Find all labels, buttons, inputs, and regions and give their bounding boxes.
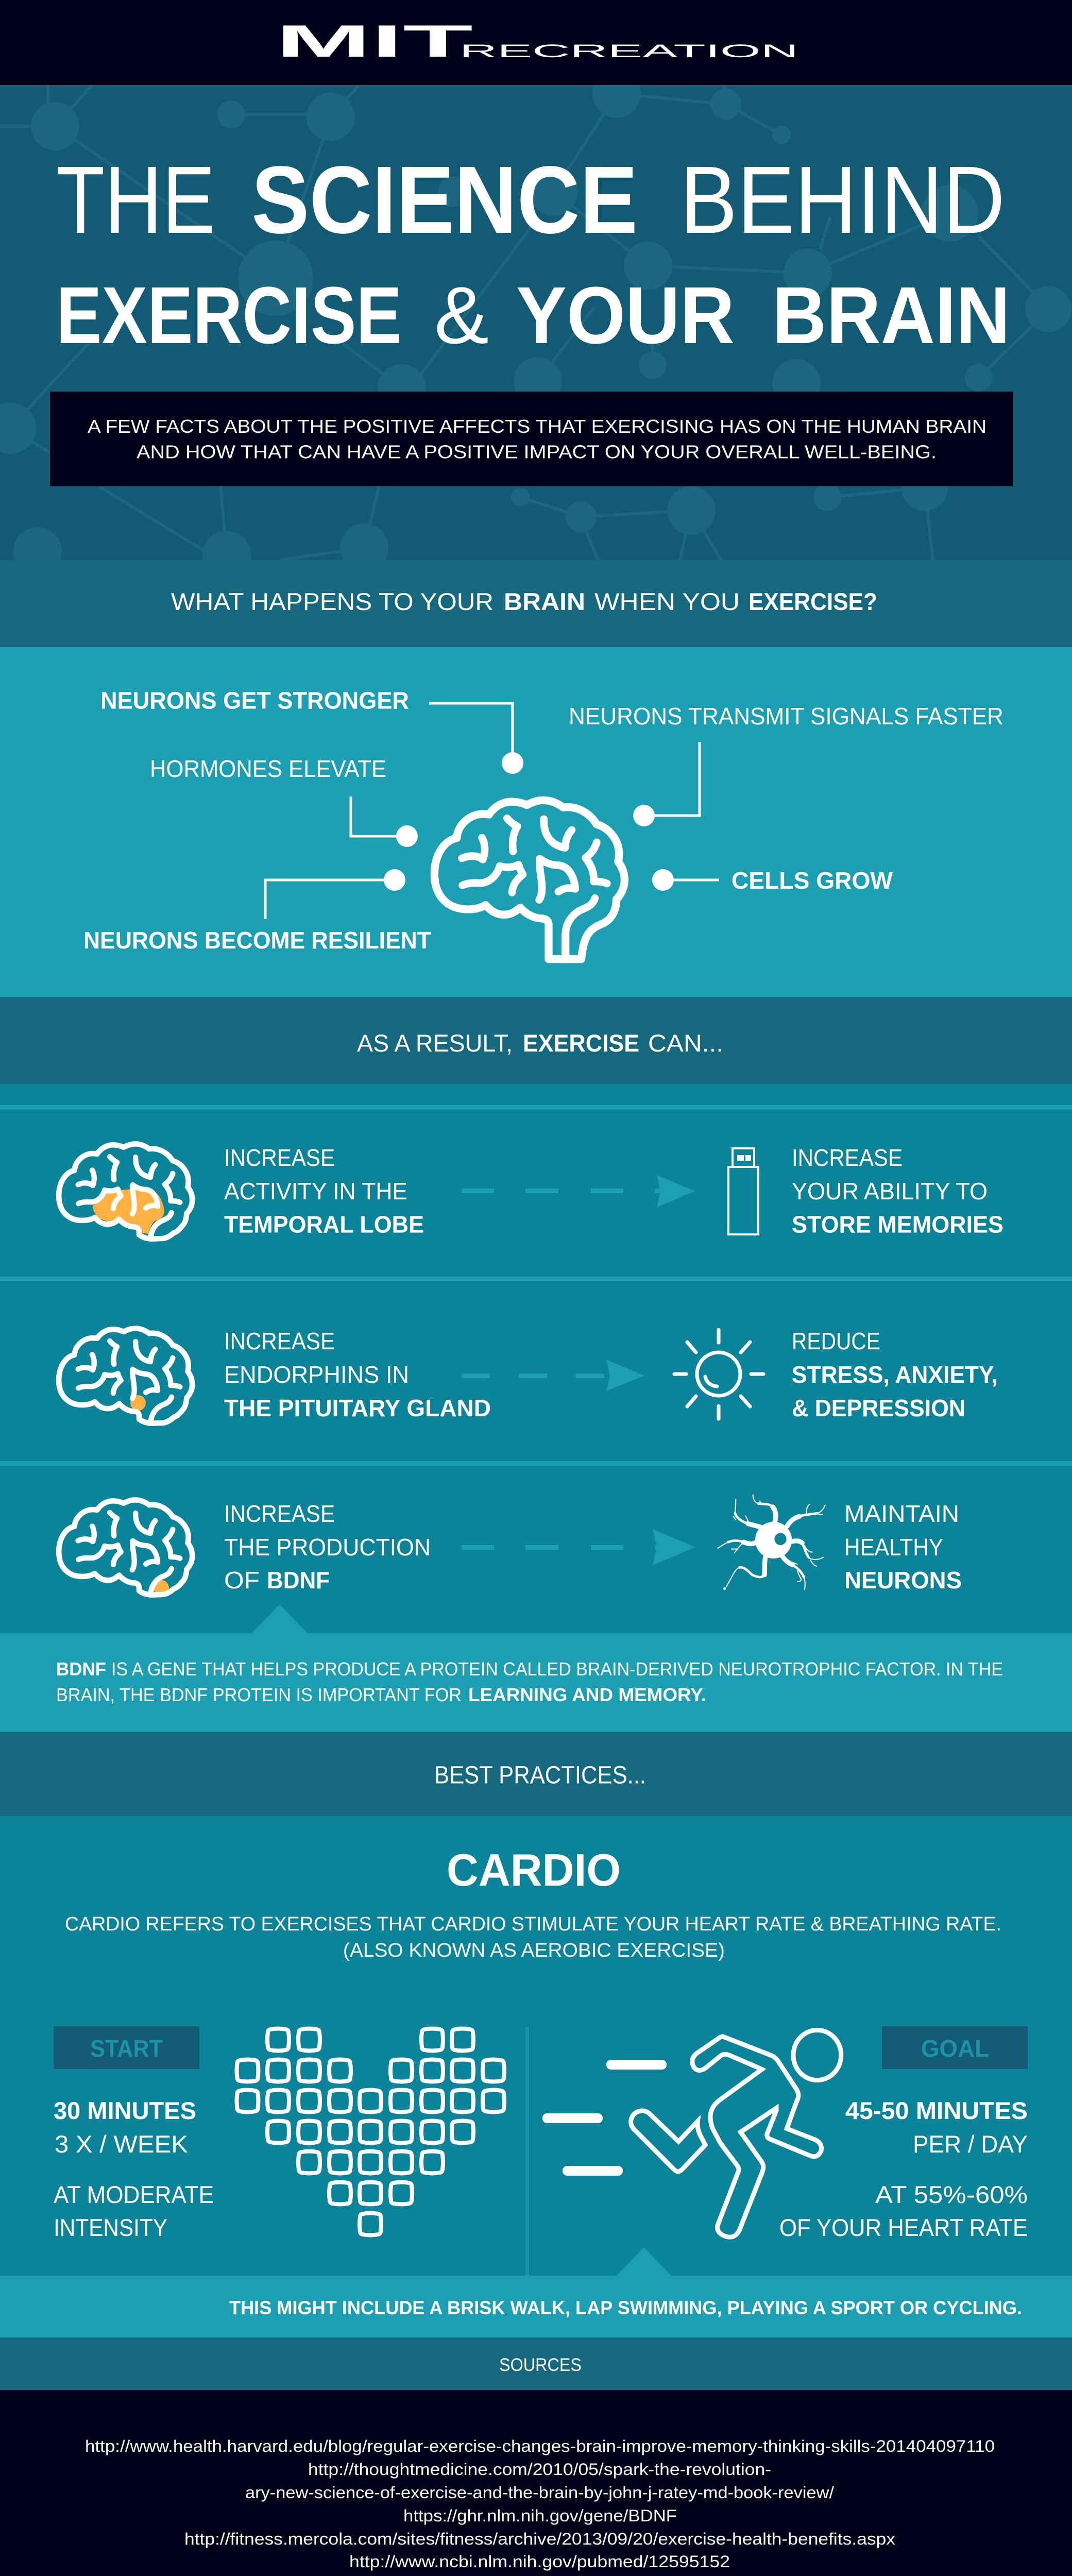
- title: SCIENCE: [251, 147, 638, 253]
- goal stats: PER / DAY: [913, 2130, 1028, 2158]
- section heading: as a result: CAN...: [648, 1029, 723, 1057]
- arrow 2: [462, 1360, 644, 1391]
- section heading: best practices: [0, 1732, 1072, 1816]
- icon: neuron: [718, 1495, 825, 1590]
- icon: brain with temporal lobe highlighted: [59, 1144, 192, 1239]
- section heading: what happens: WHAT HAPPENS TO YOUR: [171, 588, 494, 615]
- text: pituitary gland: [224, 1328, 491, 1421]
- start badge: [54, 2026, 199, 2069]
- text: temporal lobe: ACTIVITY IN THE: [224, 1178, 407, 1205]
- goal badge: GOAL: [921, 2035, 989, 2062]
- section heading: as a result: AS A RESULT,: [357, 1029, 513, 1057]
- connector lines and dots: [265, 703, 719, 919]
- start stats: 30 MINUTES: [54, 2097, 196, 2124]
- panel: footer: [0, 2390, 1072, 2576]
- text: reduce stress: STRESS, ANXIETY,: [792, 1361, 998, 1388]
- text: healthy neurons: [844, 1500, 962, 1594]
- start stats: INTENSITY: [54, 2214, 167, 2241]
- row 3: bdnf: [59, 1495, 962, 1596]
- label: neurons transmit signals faster: NEURONS TRANSMIT SIGNALS FASTER: [569, 703, 1003, 730]
- source links: http://thoughtmedicine.com/2010/05/spark-the-revolution-: [308, 2460, 771, 2479]
- label: neurons get stronger: NEURONS GET STRONGER: [100, 687, 409, 714]
- title: [56, 147, 1010, 361]
- title: THE: [56, 147, 215, 253]
- text: production of bdnf: OF: [224, 1567, 260, 1594]
- text: store memories: YOUR ABILITY TO: [792, 1178, 988, 1205]
- section heading: best practices: BEST PRACTICES...: [434, 1762, 646, 1789]
- source links: [85, 2437, 995, 2571]
- heading: cardio: CARDIO: [447, 1844, 621, 1895]
- panel: bdnf explanation: IS A GENE THAT HELPS PRODUCE A PROTEIN CALLED BRAIN-DERIVED NEUROTROPHIC FACTOR. IN THE: [111, 1658, 1003, 1680]
- text: temporal lobe: TEMPORAL LOBE: [224, 1211, 424, 1238]
- source links: http://www.health.harvard.edu/blog/regular-exercise-changes-brain-improve-memory-thinking-skills-201404097110: [85, 2437, 995, 2455]
- start badge: START: [90, 2035, 163, 2062]
- goal stats: 45-50 MINUTES: [845, 2097, 1028, 2124]
- icon: runner: [542, 2030, 841, 2237]
- text: pituitary gland: ENDORPHINS IN: [224, 1361, 409, 1388]
- start stats: 3 X / WEEK: [55, 2130, 188, 2158]
- panel: bdnf explanation: LEARNING AND MEMORY.: [468, 1684, 706, 1705]
- row 1: temporal lobe: [59, 1144, 1003, 1239]
- source links: ary-new-science-of-exercise-and-the-brain-by-john-j-ratey-md-book-review/: [245, 2483, 834, 2502]
- section heading: what happens: EXERCISE?: [748, 588, 877, 615]
- text: production of bdnf: BDNF: [267, 1567, 330, 1594]
- source links: http://fitness.mercola.com/sites/fitness/archive/2013/09/20/exercise-health-benefits.aspx: [184, 2530, 895, 2548]
- icon: brain with pituitary highlighted: [59, 1328, 192, 1423]
- panel: hero: [0, 70, 1072, 579]
- panel: activity examples: THIS MIGHT INCLUDE A BRISK WALK, LAP SWIMMING, PLAYING A SPORT OR CYCLING.: [229, 2297, 1022, 2318]
- text: temporal lobe: INCREASE: [224, 1144, 335, 1171]
- panel: activity examples: [0, 2247, 1072, 2337]
- start stats: [54, 2097, 214, 2241]
- panel: brain effects: [0, 647, 1072, 997]
- cardio description: CARDIO REFERS TO EXERCISES THAT CARDIO STIMULATE YOUR HEART RATE & BREATHING RATE.: [65, 1913, 1001, 1935]
- cardio description: [65, 1913, 1001, 1961]
- panel: bdnf explanation: [0, 1604, 1072, 1732]
- text: reduce stress: REDUCE: [792, 1328, 880, 1354]
- section heading: as a result: EXERCISE: [523, 1029, 639, 1057]
- title: EXERCISE: [56, 270, 402, 361]
- section heading: sources: [0, 2337, 1072, 2390]
- text: reduce stress: & DEPRESSION: [792, 1395, 965, 1421]
- intro callout box: [50, 392, 1013, 486]
- intro callout box: AND HOW THAT CAN HAVE A POSITIVE IMPACT ON YOUR OVERALL WELL-BEING.: [137, 441, 937, 463]
- text: healthy neurons: NEURONS: [844, 1567, 962, 1594]
- text: temporal lobe: [224, 1144, 424, 1238]
- intro callout box: A FEW FACTS ABOUT THE POSITIVE AFFECTS THAT EXERCISING HAS ON THE HUMAN BRAIN: [88, 416, 986, 437]
- title: YOUR: [516, 270, 735, 361]
- section heading: as a result: [0, 997, 1072, 1084]
- text: pituitary gland: THE PITUITARY GLAND: [224, 1395, 491, 1421]
- icon: usb drive: [728, 1148, 758, 1234]
- panel: exercise results: [0, 1084, 1072, 1633]
- section heading: what happens: [0, 560, 1072, 647]
- arrow 3: [462, 1529, 695, 1565]
- section heading: what happens: BRAIN: [504, 588, 585, 615]
- logo: Recreation: RECREATION: [460, 41, 798, 61]
- source links: http://www.ncbi.nlm.nih.gov/pubmed/12595152: [349, 2552, 730, 2571]
- cardio description: (ALSO KNOWN AS AEROBIC EXERCISE): [343, 1940, 725, 1961]
- title: &: [434, 270, 489, 361]
- start stats: AT MODERATE: [54, 2181, 214, 2208]
- goal badge: [882, 2026, 1028, 2069]
- text: healthy neurons: HEALTHY: [844, 1534, 943, 1561]
- icon: large brain: [434, 800, 624, 959]
- text: store memories: INCREASE: [792, 1144, 903, 1171]
- goal stats: AT 55%-60%: [875, 2181, 1028, 2208]
- icon: brain with bdnf region highlighted: [59, 1500, 192, 1596]
- text: production of bdnf: THE PRODUCTION: [224, 1534, 431, 1561]
- icon: heart of squares: [237, 2029, 504, 2235]
- title: BEHIND: [680, 147, 1005, 253]
- text: store memories: STORE MEMORIES: [792, 1211, 1003, 1238]
- page header bar with logo: [0, 0, 1072, 85]
- label: hormones elevate: HORMONES ELEVATE: [150, 755, 386, 782]
- title: BRAIN: [772, 270, 1010, 361]
- source links: https://ghr.nlm.nih.gov/gene/BDNF: [403, 2506, 677, 2525]
- text: production of bdnf: INCREASE: [224, 1500, 335, 1527]
- text: pituitary gland: INCREASE: [224, 1328, 335, 1354]
- section heading: sources: SOURCES: [499, 2355, 582, 2375]
- panel: bdnf explanation: BDNF: [56, 1658, 106, 1680]
- icon: sun: [674, 1330, 763, 1419]
- label: cells grow: CELLS GROW: [731, 867, 893, 894]
- row 2: pituitary gland: [59, 1328, 998, 1423]
- panel: bdnf explanation: BRAIN, THE BDNF PROTEIN IS IMPORTANT FOR: [56, 1684, 462, 1705]
- arrow 1: [462, 1175, 695, 1207]
- neural network background pattern: [0, 70, 1071, 579]
- section heading: what happens: WHEN YOU: [594, 588, 740, 615]
- goal stats: [779, 2097, 1028, 2241]
- label: neurons become resilient: NEURONS BECOME RESILIENT: [83, 927, 431, 954]
- text: production of bdnf: [224, 1500, 431, 1594]
- text: healthy neurons: MAINTAIN: [844, 1500, 959, 1527]
- panel: cardio: [0, 1816, 1072, 2276]
- text: store memories: [792, 1144, 1003, 1238]
- logo: MIT: MIT: [276, 15, 473, 66]
- goal stats: OF YOUR HEART RATE: [779, 2214, 1028, 2241]
- text: reduce stress: [792, 1328, 998, 1421]
